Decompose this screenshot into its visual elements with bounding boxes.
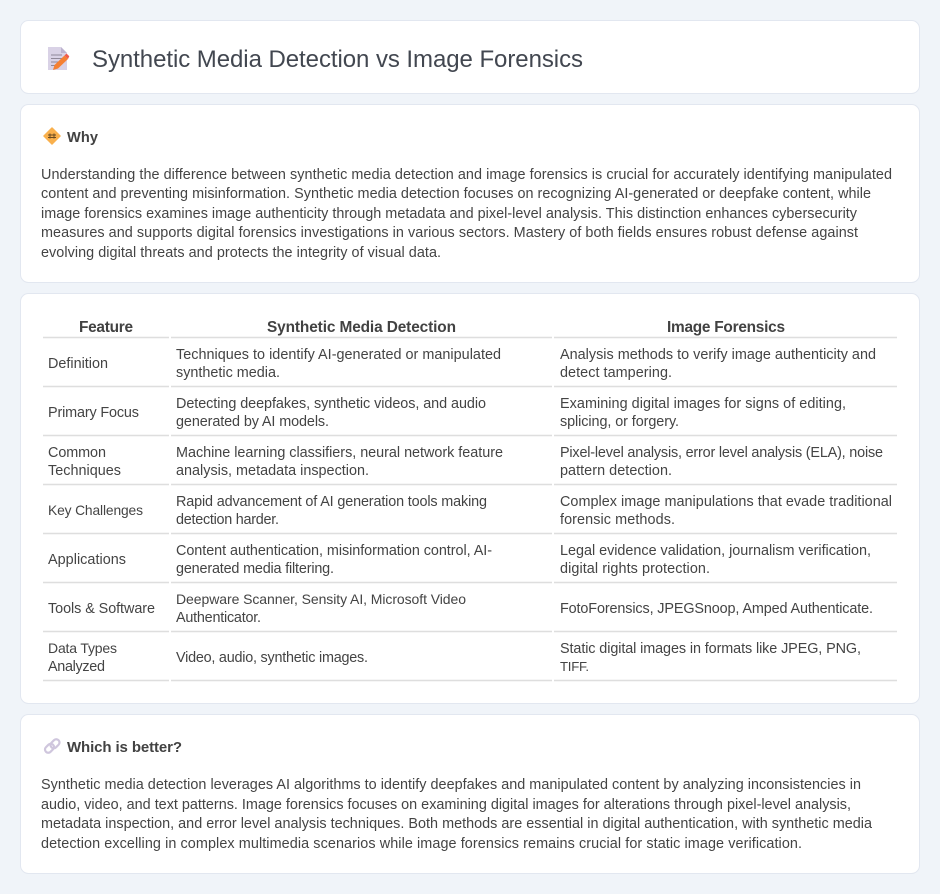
row: data types analyzed [43, 640, 897, 680]
row: definition: Analysis methods to verify image authenticity and [560, 347, 876, 363]
panel: why [20, 104, 920, 282]
row: common techniques: analysis, metadata inspection. [176, 463, 369, 479]
row: definition: Techniques to identify AI-generated or manipulated [176, 347, 501, 363]
title: Synthetic Media Detection vs Image Forensics [92, 46, 583, 73]
text block: why paragraph: evolving digital threats and protects the integrity of visual data. [41, 245, 441, 261]
row: primary focus: generated by AI models. [176, 414, 329, 430]
row: primary focus: Examining digital images for signs of editing, [560, 396, 846, 412]
row: definition: detect tampering. [560, 365, 672, 381]
row: applications: generated media filtering. [176, 561, 334, 577]
row: definition: Definition [48, 356, 108, 372]
text block: which is better paragraph: metadata inspection, and error level analysis techniques. Both methods are essential in digital authentication, with synthetic media [41, 816, 872, 832]
icon: warning diamond [44, 128, 60, 144]
icon: memo with pencil [48, 47, 69, 70]
row: data types analyzed: Video, audio, synthetic images. [176, 650, 368, 666]
row: definition [43, 347, 897, 386]
row: common techniques: pattern detection. [560, 463, 672, 479]
row: tools and software [43, 591, 897, 632]
text block: which is better paragraph: detection excelling in complex multimedia scenarios while image forensics remains crucial for static image verification. [41, 836, 802, 852]
text block: why paragraph: content and preventing misinformation. Synthetic media detection focuses on recognizing AI-generated or deepfake content, while [41, 186, 871, 202]
table header: Feature [79, 319, 133, 336]
icon: chain link [44, 738, 61, 754]
row: applications: digital rights protection. [560, 561, 710, 577]
text block: which is better paragraph: Synthetic media detection leverages AI algorithms to identify deepfakes and manipulated content by analyzing inconsistencies in [41, 777, 861, 793]
panel: title header [20, 20, 920, 94]
row: primary focus: Primary Focus [48, 405, 139, 421]
panel: which is better [20, 714, 920, 874]
heading: why: Why [67, 130, 99, 146]
row: tools and software: Authenticator. [176, 610, 261, 626]
row: applications: Content authentication, misinformation control, AI- [176, 543, 492, 559]
row: data types analyzed: TIFF. [560, 659, 589, 674]
row: primary focus [43, 396, 897, 436]
row: data types analyzed: Data Types [48, 640, 117, 656]
row: primary focus: Detecting deepfakes, synthetic videos, and audio [176, 396, 486, 412]
row: common techniques: Techniques [48, 463, 121, 479]
row: applications: Applications [48, 552, 126, 568]
row: data types analyzed: Analyzed [48, 659, 105, 675]
row: key challenges: Complex image manipulations that evade traditional [560, 494, 892, 510]
table header: Image Forensics [667, 319, 785, 336]
row: key challenges [43, 494, 897, 534]
row: definition: synthetic media. [176, 365, 280, 381]
row: primary focus: splicing, or forgery. [560, 414, 679, 430]
text block: which is better paragraph: audio, video, and text patterns. Image forensics focuses on examining digital images for alterations through pixel-level analysis, [41, 797, 851, 813]
row: key challenges: Key Challenges [48, 503, 143, 518]
row: tools and software: FotoForensics, JPEGSnoop, Amped Authenticate. [560, 601, 873, 617]
text block: why paragraph [41, 167, 892, 261]
row: applications: Legal evidence validation, journalism verification, [560, 543, 871, 559]
text block: why paragraph: Understanding the difference between synthetic media detection and image forensics is crucial for accurately identifying manipulated [41, 167, 892, 183]
heading: which is better: Which is better? [67, 739, 182, 756]
row: common techniques [43, 445, 897, 484]
table header [43, 319, 897, 338]
text block: why paragraph: image forensics examines image authenticity through metadata and pixel-level analysis. This distinction enhances cybersecurity [41, 206, 858, 222]
row: applications [43, 543, 897, 582]
row: common techniques: Pixel-level analysis, error level analysis (ELA), noise [560, 445, 883, 461]
row: tools and software: Deepware Scanner, Sensity AI, Microsoft Video [176, 591, 466, 607]
row: data types analyzed: Static digital images in formats like JPEG, PNG, [560, 641, 861, 657]
row: key challenges: Rapid advancement of AI generation tools making [176, 494, 487, 510]
row: key challenges: detection harder. [176, 512, 279, 528]
row: common techniques: Common [48, 445, 106, 461]
row: tools and software: Tools & Software [48, 601, 155, 617]
panel: comparison table [20, 294, 920, 704]
row: common techniques: Machine learning classifiers, neural network feature [176, 445, 503, 461]
row: key challenges: forensic methods. [560, 512, 675, 528]
table header: Synthetic Media Detection [267, 319, 456, 336]
text block: which is better paragraph [41, 777, 872, 852]
text block: why paragraph: measures and supports digital forensics investigations in various sectors. Mastery of both fields ensures robust defense against [41, 225, 858, 241]
